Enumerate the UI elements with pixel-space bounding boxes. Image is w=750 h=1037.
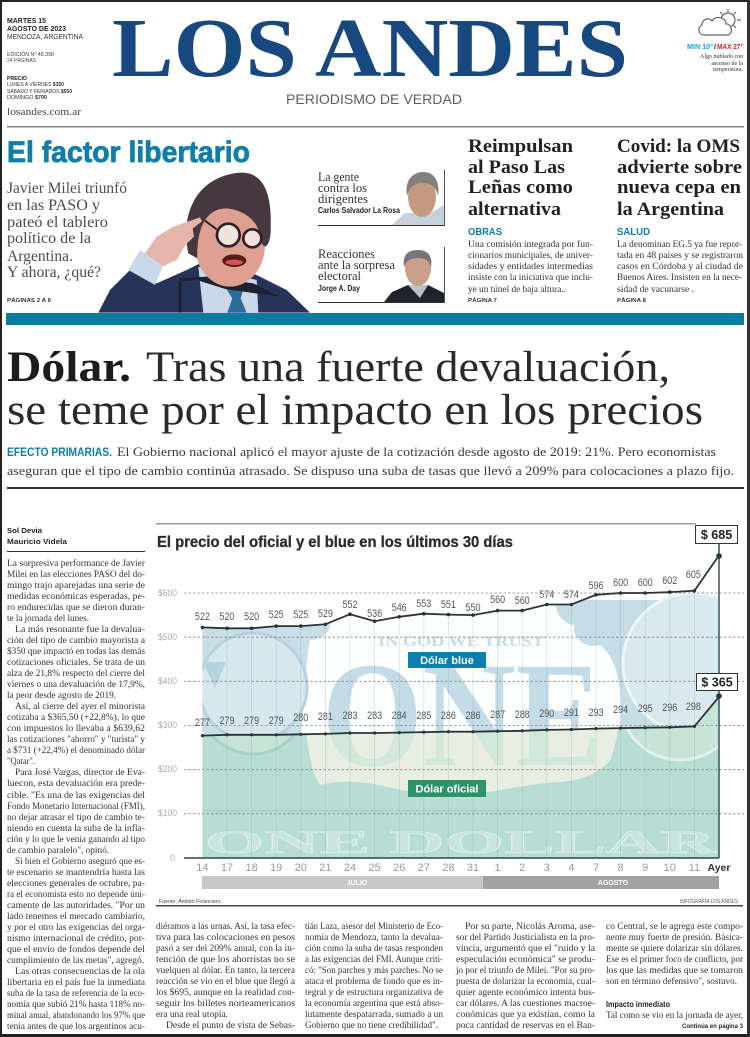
- value labels: dólar blue: 596: [588, 580, 604, 592]
- deck text: Argentina.: [7, 248, 73, 265]
- panel: story Reimpulsan al Paso Las Leñas: al Paso Las: [468, 157, 565, 178]
- panel: story Reimpulsan al Paso Las Leñas: Reimpulsan: [468, 136, 573, 157]
- article column 4: puesta de dolarizar la economía, cual-: [456, 976, 595, 987]
- headline summary: [7, 445, 734, 478]
- vertical guide lines: [227, 591, 694, 858]
- month bar: agosto: AGOSTO: [598, 880, 629, 887]
- panel: story Covid: advierte sobre: [617, 157, 742, 178]
- main headline: se teme por el impacto en los precios: [7, 387, 703, 434]
- panel: story Reimpulsan al Paso Las Leñas: Una comisión integrada por fun-: [468, 239, 593, 250]
- value labels: dólar oficial: 291: [564, 707, 579, 719]
- x axis day labels: 21: [319, 862, 332, 874]
- article column 1: no dejar atrasar el tipo de cambio te-: [7, 812, 145, 823]
- weather forecast: [687, 43, 743, 73]
- value labels: dólar blue: 560: [515, 595, 530, 607]
- dollar bill background: blue zone: IN GOD WE TRUST: [378, 634, 544, 650]
- value labels: dólar oficial: 279: [269, 715, 284, 727]
- article column 5: son en término defensivo", sostuvo.: [606, 976, 737, 987]
- panel: column Reacciones ante la sorpresa electoral: electoral: [318, 269, 362, 283]
- article column 3: [305, 921, 443, 1031]
- y axis labels: 0: [170, 853, 175, 863]
- x axis day labels: 27: [418, 862, 430, 874]
- panel: story Reimpulsan al Paso Las Leñas: insiste con la iniciativa que inclu-: [468, 272, 593, 283]
- article column 1: luecon, esta devaluación era prede-: [7, 778, 145, 789]
- article column 4: Por su parte, Nicolás Aroma, ase-: [465, 921, 595, 932]
- edition details: losandes.com.ar: [7, 107, 82, 118]
- value labels: dólar blue: 522: [195, 611, 210, 623]
- series line: dólar oficial: [201, 693, 722, 737]
- article column 3: Gobierno que no tiene credibilidad".: [305, 1020, 438, 1031]
- article column 4: poca cantidad de reservas en el Ban-: [456, 1020, 595, 1031]
- article column 1: La sorpresiva performance de Javier: [7, 558, 146, 569]
- article column 4: vincia, argumentó que el "ruido y la: [456, 943, 596, 954]
- x axis day labels: 24: [344, 862, 356, 874]
- value labels: dólar oficial: 277: [195, 717, 210, 729]
- article column 4: especulación económica" se produ-: [456, 954, 595, 965]
- panel: story Reimpulsan al Paso Las Leñas: cionarios municipales, de univer-: [468, 250, 593, 261]
- article column 5: [606, 921, 744, 1030]
- article column 1: de cambio paralelo", opinó.: [7, 845, 109, 856]
- article column 1: Si bien el Gobierno aseguró que es-: [15, 856, 145, 867]
- article column 2: [156, 921, 296, 1031]
- panel: column La gente contra los dirigentes: contra los: [318, 181, 367, 195]
- x axis day labels: 9: [642, 862, 648, 874]
- article column 1: lado tenemos el mercado cambiario,: [7, 911, 145, 922]
- x axis day labels: 28: [442, 862, 455, 874]
- x axis day labels: [196, 862, 730, 874]
- value labels: dólar oficial: 298: [686, 701, 701, 713]
- series line: dólar blue: [201, 553, 722, 630]
- teal divider bar: [6, 313, 744, 325]
- article column 1: "Qatar".: [7, 756, 35, 767]
- x axis day labels: 25: [368, 862, 381, 874]
- article column 1: te la jornada del lunes.: [7, 613, 89, 624]
- value labels: dólar blue: 525: [293, 609, 308, 621]
- article column 2: tiva para las colocaciones en pesos: [156, 932, 295, 943]
- callout: $ 365: [696, 674, 738, 690]
- article column 5: Impacto inmediato: [606, 1000, 670, 1009]
- panel: story Covid: la Argentina: [617, 199, 725, 220]
- article column 1: suba de la tasa de referencia de la eco-: [7, 988, 145, 999]
- value labels: dólar oficial: 283: [367, 710, 382, 722]
- article column 3: la economía argentina que está abso-: [305, 998, 443, 1009]
- byline: Sol Devia: [7, 526, 43, 535]
- panel: story Covid: sidad de vacunarse .: [617, 284, 694, 295]
- dollar bill background: blue zone: ONE: [322, 632, 602, 798]
- value labels: dólar oficial: 283: [342, 710, 358, 722]
- value labels: dólar oficial: 281: [318, 711, 333, 723]
- month bar: julio: JULIO: [347, 880, 368, 887]
- article column 2: pasó a ser del 209% anual, con la in-: [156, 943, 295, 954]
- article column 1: ro endurecidas que se dieron duran-: [7, 602, 145, 613]
- value labels: dólar blue: 605: [686, 569, 701, 581]
- article column 5: Ese es el primer foco de conflicto, por: [606, 954, 744, 965]
- article column 4: car dólares. A las cuestiones macroe-: [456, 998, 595, 1009]
- dollar bill background: green zone: ONE DOLLAR: [205, 825, 719, 861]
- panel: story Covid: SALUD: [617, 226, 650, 238]
- panel: story Covid: [617, 136, 743, 304]
- callout: $ 365: $ 365: [701, 676, 733, 690]
- y axis labels: $400: [158, 676, 177, 686]
- byline: [7, 526, 68, 546]
- article column 4: sor del Partido Justicialista en la pro-: [456, 932, 595, 943]
- panel: story Covid: nueva cepa en: [617, 177, 741, 198]
- article column 1: Así, al cierre del ayer el minorista: [15, 701, 146, 712]
- x axis day labels: 26: [393, 862, 405, 874]
- panel: column La gente contra los dirigentes: La gente: [318, 170, 359, 184]
- value labels: dólar oficial: 294: [613, 704, 628, 716]
- panel: El factor libertario: PÁGINAS 2 A 6: [7, 297, 51, 304]
- value labels: dólar oficial: 286: [441, 710, 456, 722]
- weather forecast: Algo nublado con: [700, 54, 743, 60]
- article column 5: co Central, se le agrega este compo-: [606, 921, 743, 932]
- y axis labels: $500: [158, 632, 177, 642]
- callout: $ 685: [696, 526, 738, 544]
- edition details: DOMINGO $700: [7, 95, 47, 101]
- article column 1: ra el economista esto no depende úni-: [7, 889, 145, 900]
- value labels: dólar blue: 560: [490, 594, 505, 606]
- article column 1: minal anual, abandonando los 97% que: [7, 1010, 145, 1021]
- headline summary: aseguran que el tipo de cambio continúa atrasado. Se dispuso una suba de tasas que llevó a 209% para colocaciones a plazo fijo.: [7, 464, 734, 478]
- edition details: LUNES A VIERNES $350: [7, 82, 64, 88]
- x axis day labels: 4: [568, 862, 574, 874]
- article column 4: [455, 921, 596, 1031]
- article column 3: ataca el problema de fondo que es in-: [305, 976, 443, 987]
- x axis day labels: 3: [544, 862, 550, 874]
- main headline: [7, 344, 703, 434]
- panel: story Reimpulsan al Paso Las Leñas: sidades y entidades intermedias: [468, 261, 593, 272]
- article column 1: cible. "Es una de las exigencias del: [7, 790, 145, 801]
- x axis day labels: 20: [295, 862, 307, 874]
- dollar bill background: blue zone: [202, 592, 718, 735]
- chart title: El precio del oficial y el blue en los últimos 30 días: [157, 534, 513, 551]
- panel: column Reacciones ante la sorpresa electoral: ante la sorpresa: [318, 258, 395, 272]
- value labels: dólar oficial: 280: [293, 712, 308, 724]
- value labels: dólar blue: 602: [662, 575, 677, 587]
- value labels: dólar blue: 520: [244, 611, 259, 623]
- value labels: dólar oficial: 279: [244, 715, 259, 727]
- weather forecast: MIN 10°: [687, 43, 713, 51]
- panel: story Reimpulsan al Paso Las Leñas: Leñas como: [468, 177, 573, 198]
- article column 1: que el envío de fondos depende del: [7, 944, 145, 955]
- value labels: dólar oficial: 285: [416, 710, 431, 722]
- value labels: dólar oficial: 290: [539, 708, 554, 720]
- article column 2: reacción se vio en el blue que llegó a: [156, 976, 296, 987]
- article column 3: a las exigencias del FMI. Aunque criti-: [305, 954, 443, 965]
- article column 2: diéramos a las urnas. Así, la tasa efec-: [156, 921, 295, 932]
- masthead logo: LOS ANDES: [112, 2, 628, 95]
- article column 1: Las otras consecuencias de la ola: [15, 966, 146, 977]
- article column 2: vuelquen al dólar. En tanto, la tercera: [156, 965, 296, 976]
- y axis labels: $600: [158, 588, 177, 598]
- x axis day labels: 14: [196, 862, 209, 874]
- x axis day labels: 7: [593, 862, 599, 874]
- article column 1: Para José Vargas, director de Eva-: [15, 767, 145, 778]
- month bar: agosto: [483, 876, 719, 889]
- article column 3: ción como la suba de tasas responden: [305, 943, 443, 954]
- value labels: dólar blue: 552: [342, 599, 358, 611]
- deck text: Y ahora, ¿qué?: [7, 264, 101, 281]
- weather forecast: MAX 27°: [717, 43, 743, 51]
- article column 4: quier agente económico intenta bus-: [456, 987, 595, 998]
- headline summary: El Gobierno nacional aplicó el mayor ajuste de la cotización desde agosto de 2019: 21%. Pero economistas: [117, 445, 716, 459]
- main headline: Tras una fuerte devaluación,: [146, 344, 670, 391]
- x axis day labels: Ayer: [708, 862, 730, 874]
- y axis labels: $300: [158, 720, 177, 730]
- edition details: MENDOZA, ARGENTINA: [7, 32, 83, 41]
- dollar bill background: green zone: ONE: [322, 632, 602, 798]
- edition details: EDICIÓN Nº 48.398: [7, 51, 54, 58]
- article column 2: tención de que los ahorristas no se: [156, 954, 295, 965]
- panel: column La gente contra los dirigentes: dirigentes: [318, 192, 368, 206]
- panel: story Covid: PÁGINA 8: [617, 297, 646, 304]
- article column 1: ción y lo que le venía ganando al tipo: [7, 834, 145, 845]
- icon: weather cloud and sun: [699, 9, 741, 35]
- value labels: dólar oficial: 279: [220, 715, 234, 727]
- article column 3: lutamente despatarrada, sumado a un: [305, 1009, 443, 1020]
- article column 5: Continúa en página 3: [682, 1023, 743, 1030]
- article column 1: tenía antes de que los argentinos acu-: [7, 1021, 145, 1032]
- horizontal grid lines: [184, 593, 744, 814]
- article column 1: nismo internacional de crédito, por-: [7, 933, 145, 944]
- panel: story Reimpulsan al Paso Las Leñas: alternativa: [468, 199, 562, 220]
- article column 1: medidas económicas esperadas, pe-: [7, 591, 145, 602]
- tag: Dólar blue: Dólar blue: [420, 655, 474, 667]
- value labels: dólar blue: 600: [638, 577, 653, 589]
- article column 4: conómicas que ya existían, como la: [456, 1009, 596, 1020]
- edition details: MARTES 15: [7, 16, 46, 25]
- byline: Mauricio Videla: [7, 537, 68, 546]
- panel: column La gente contra los dirigentes: Carlos Salvador La Rosa: [318, 206, 400, 215]
- deck text: [7, 180, 127, 281]
- article column 5: nente muy fuerte de presión. Básica-: [606, 932, 743, 943]
- panel: El factor libertario: [7, 136, 310, 313]
- callout: $ 685: $ 685: [701, 528, 732, 542]
- article column 1: las cotizaciones "ahorro" y "turista" y: [7, 734, 145, 745]
- value labels: dólar blue: 553: [416, 598, 431, 610]
- main headline: Dólar.: [7, 344, 131, 391]
- article column 1: viernes o una devaluación de 17,9%,: [7, 679, 145, 690]
- article column 1: [7, 558, 146, 1032]
- chart: official and blue dollar prices: [156, 523, 750, 906]
- article column 1: nomía que subió 21% hasta 118% no-: [7, 999, 145, 1010]
- x axis day labels: 2: [519, 862, 525, 874]
- x axis day labels: 11: [689, 862, 700, 874]
- article column 5: mente se quiere dolarizar sin dólares.: [606, 943, 743, 954]
- value labels: dólar blue: 529: [318, 608, 333, 620]
- month bar: julio: [202, 876, 483, 889]
- panel: column La gente contra los dirigentes: [318, 170, 445, 226]
- article column 1: cumplimiento de las metas", agregó.: [7, 955, 144, 966]
- value labels: dólar blue: 600: [613, 577, 628, 589]
- article column 1: Fondo Monetario Internacional (FMI),: [7, 801, 145, 812]
- article column 1: y por el otro las exigencias del orga-: [7, 922, 145, 933]
- x axis day labels: 10: [664, 862, 676, 874]
- article column 3: nomía de Mendoza, tanto la devalua-: [305, 932, 443, 943]
- value labels: dólar oficial: 287: [490, 709, 505, 721]
- article column 1: La más resonante fue la devalua-: [15, 624, 145, 635]
- value labels: dólar blue: 550: [466, 602, 480, 614]
- panel: story Reimpulsan al Paso Las Leñas: OBRAS: [468, 226, 502, 238]
- x axis day labels: 17: [221, 862, 233, 874]
- value labels: dólar oficial: 296: [662, 702, 677, 714]
- deck text: pateó el tablero: [7, 214, 108, 231]
- panel: story Reimpulsan al Paso Las Leñas: ye un túnel de baja altura..: [468, 284, 566, 295]
- value labels: dólar oficial: [195, 701, 701, 729]
- article column 1: cotizaciones oficiales. Se trata de un: [7, 657, 145, 668]
- article column 1: libertaria en el país fue la inmediata: [7, 977, 146, 988]
- panel: story Covid: Covid: la OMS: [617, 136, 740, 157]
- x axis day labels: 18: [245, 862, 258, 874]
- weather forecast: ascenso de la: [711, 61, 743, 67]
- value labels: dólar blue: 536: [367, 608, 382, 620]
- article column 1: $350 que impactó en todas las demás: [7, 646, 145, 657]
- article column 2: era una real utopía.: [156, 1009, 228, 1020]
- y axis labels: [158, 588, 177, 863]
- value labels: dólar oficial: 293: [588, 707, 604, 719]
- edition details: AGOSTO DE 2023: [7, 24, 66, 33]
- infographic credit: INFOGRAFÍA LOS ANDES: [680, 898, 738, 905]
- x axis day labels: 8: [618, 862, 624, 874]
- value labels: dólar blue: 574: [564, 589, 579, 601]
- panel: story Covid: tada en 48 países y se registraron: [617, 250, 743, 261]
- panel: story Covid: casos en Córdoba y al ciudad de: [617, 261, 743, 272]
- panel: story Reimpulsan al Paso Las Leñas: [468, 136, 593, 304]
- panel: story Covid: La denominan EG.5 ya fue repor-: [617, 239, 742, 250]
- value labels: dólar oficial: 284: [392, 710, 407, 722]
- panel: story Reimpulsan al Paso Las Leñas: PÁGINA 7: [468, 297, 497, 304]
- value labels: dólar blue: 525: [269, 609, 284, 621]
- edition details: PRECIO: [7, 76, 28, 82]
- panel: column Reacciones ante la sorpresa electoral: [318, 247, 445, 303]
- photo: Javier Milei: [98, 173, 310, 313]
- article column 5: los que las medidas que se tomaron: [606, 965, 743, 976]
- y axis labels: $200: [158, 764, 177, 774]
- value labels: dólar blue: 551: [441, 599, 456, 611]
- value labels: dólar oficial: 295: [638, 703, 653, 715]
- value labels: dólar blue: 546: [392, 602, 407, 614]
- article column 1: Milei en las elecciones PASO del do-: [7, 569, 145, 580]
- tag: Dólar blue: [408, 652, 486, 668]
- panel: story Covid: Buenos Aires. Insisten en la nece-: [617, 272, 742, 283]
- heading: El factor libertario: [7, 136, 250, 169]
- x axis day labels: 1: [495, 862, 501, 874]
- article column 1: la peor desde agosto de 2019.: [7, 690, 116, 701]
- article column 1: ción del tipo de cambio mayorista a: [7, 635, 146, 646]
- photo: Carlos Salvador La Rosa: [392, 172, 444, 225]
- deck text: Javier Milei triunfó: [7, 180, 127, 197]
- axes: [184, 543, 719, 858]
- dollar bill background: green zone: [202, 699, 718, 858]
- tagline: PERIODISMO DE VERDAD: [286, 91, 462, 107]
- value labels: dólar blue: [195, 569, 701, 623]
- article column 5: Tal como se vio en la jornada de ayer,: [606, 1010, 743, 1021]
- deck text: político de la: [7, 230, 91, 247]
- value labels: dólar oficial: 288: [515, 709, 530, 721]
- deck text: en las PASO y: [7, 197, 100, 214]
- article column 1: elecciones generales de octubre, pa-: [7, 878, 145, 889]
- article column 3: tián Laza, asesor del Ministerio de Eco-: [305, 921, 443, 932]
- article column 1: alza de 21,8% respecto del cierre del: [7, 668, 145, 679]
- article column 1: mingo trajo aparejadas una serie de: [7, 580, 145, 591]
- value labels: dólar blue: 520: [220, 611, 234, 623]
- article column 2: los $695, aunque en la realidad con-: [156, 987, 295, 998]
- x axis day labels: 31: [467, 862, 479, 874]
- article column 1: cotizaba a $365,50 (+22,8%), lo que: [7, 712, 145, 723]
- tag: Dólar oficial: Dólar oficial: [416, 784, 478, 796]
- weather forecast: temperatura.: [713, 67, 743, 73]
- article column 1: niendo en cuenta la suba de la infla-: [7, 823, 145, 834]
- panel: column Reacciones ante la sorpresa electoral: Jorge A. Day: [318, 284, 360, 293]
- edition details: 24 PÁGINAS: [7, 57, 36, 64]
- tag: Dólar oficial: [408, 780, 486, 797]
- article column 1: con impuestos lo llevaba a $639,62: [7, 723, 145, 734]
- edition details: SÁBADO Y FERIADOS $550: [7, 88, 72, 95]
- value labels: dólar blue: 574: [539, 589, 554, 601]
- value labels: dólar oficial: 286: [466, 710, 480, 722]
- article column 1: a $731 (+22,4%) el denominado dólar: [7, 745, 146, 756]
- article column 1: camente de las autoridades. "Por un: [7, 900, 145, 911]
- headline summary: EFECTO PRIMARIAS.: [7, 447, 112, 459]
- article column 2: Desde el punto de vista de Sebas-: [166, 1020, 295, 1031]
- article column 2: seguir los billetes norteamericanos: [156, 998, 295, 1009]
- article column 1: te escenario se mantendría hasta las: [7, 867, 145, 878]
- edition details: [7, 16, 83, 118]
- weather forecast: /: [714, 44, 716, 51]
- panel: column Reacciones ante la sorpresa electoral: Reacciones: [318, 247, 375, 261]
- article column 3: có: "Son parches y más parches. No se: [305, 965, 443, 976]
- y axis labels: $100: [158, 808, 177, 818]
- x axis day labels: 19: [270, 862, 282, 874]
- photo: Jorge A. Day: [384, 250, 444, 302]
- article column 3: tegral y de estructura organizativa de: [305, 987, 443, 998]
- source credit: Fuente: Ámbito Financiero.: [159, 898, 222, 905]
- article column 4: jo por el triunfo de Milei. "Por su pro-: [455, 965, 595, 976]
